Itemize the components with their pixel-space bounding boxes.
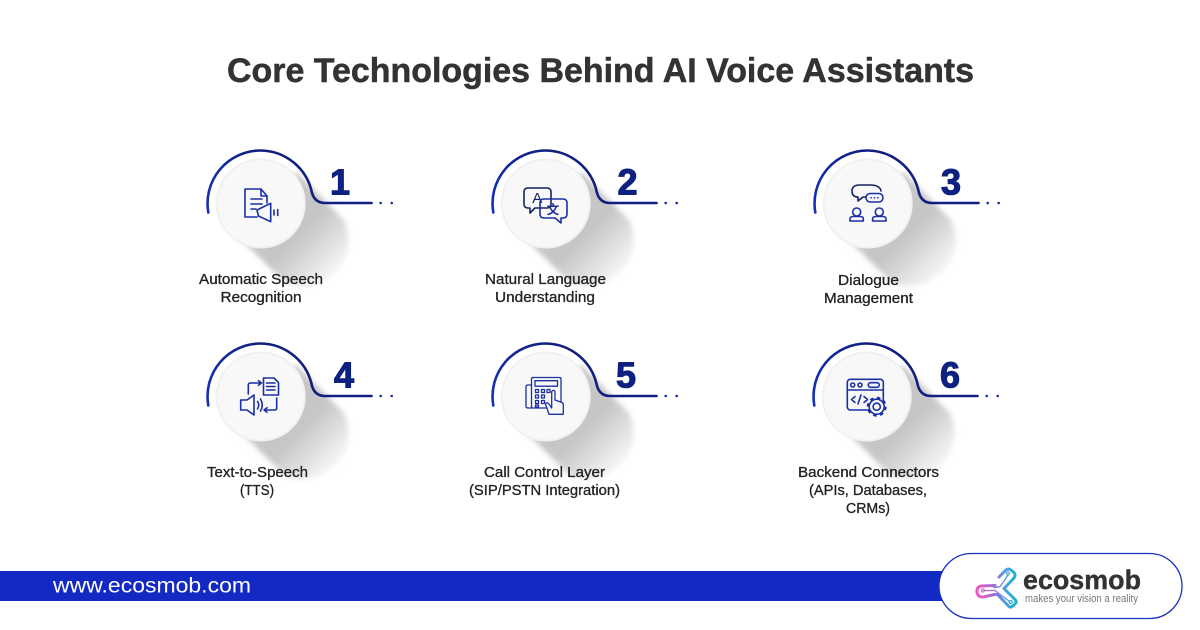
icon: document with speaker (245, 189, 278, 222)
panel: call control layer (469, 343, 678, 499)
label (798, 465, 939, 517)
label: Dialogue (838, 273, 899, 289)
number 5: 5 (616, 354, 636, 396)
label (485, 272, 606, 306)
number 4: 4 (334, 354, 354, 396)
icon: two people talking (850, 185, 886, 221)
panel: dialogue management (815, 150, 1000, 307)
label (199, 272, 323, 306)
label: (APIs, Databases, (809, 483, 927, 499)
number 2: 2 (617, 162, 638, 202)
panel: natural language understanding (485, 150, 678, 306)
label: Automatic Speech (199, 272, 323, 288)
circle badge with shadow (217, 160, 349, 286)
label: Management (824, 291, 913, 307)
label: (SIP/PSTN Integration) (469, 483, 620, 499)
logo tagline: makes your vision a reality (1025, 593, 1138, 605)
connector arc and dots (493, 150, 678, 212)
label (824, 273, 913, 307)
label: (TTS) (240, 483, 274, 499)
icon: code window with gear (847, 379, 886, 416)
icon: text and speaker conversion (241, 378, 278, 415)
label: Call Control Layer (484, 465, 605, 481)
circle badge with shadow (217, 352, 349, 479)
logo pill (939, 554, 1182, 618)
circle badge with shadow (823, 352, 955, 479)
panel: backend connectors (798, 343, 999, 517)
number 3: 3 (941, 162, 961, 202)
circle badge with shadow (502, 352, 634, 479)
circle badge with shadow (824, 160, 956, 286)
connector arc and dots (493, 343, 678, 406)
website url: www.ecosmob.com (52, 574, 251, 598)
icon: translation bubbles: A (532, 190, 542, 207)
icon: translation bubbles (524, 188, 567, 223)
icon: translation bubbles: 文 (547, 202, 560, 217)
label (469, 465, 620, 499)
footer bar (0, 571, 950, 601)
label: CRMs) (846, 501, 890, 517)
label: Backend Connectors (798, 465, 939, 481)
panel: text-to-speech (207, 343, 393, 499)
label: Text-to-Speech (207, 465, 308, 481)
circle badge with shadow (502, 160, 634, 286)
logo wordmark: ecosmob (1023, 565, 1141, 595)
icon: ecosmob logo mark (977, 569, 1016, 607)
connector arc and dots (815, 150, 1000, 212)
connector arc and dots (208, 343, 393, 406)
label: Natural Language (485, 272, 606, 288)
number 6: 6 (940, 354, 960, 396)
connector arc and dots (814, 343, 999, 406)
label: Understanding (495, 290, 595, 306)
connector arc and dots (208, 150, 393, 212)
panel: automatic speech recognition (199, 150, 393, 306)
title: Core Technologies Behind AI Voice Assistants (227, 52, 974, 90)
number 1: 1 (330, 162, 350, 202)
label: Recognition (220, 290, 302, 306)
label (207, 465, 308, 499)
icon: keypad with finger (526, 378, 563, 414)
